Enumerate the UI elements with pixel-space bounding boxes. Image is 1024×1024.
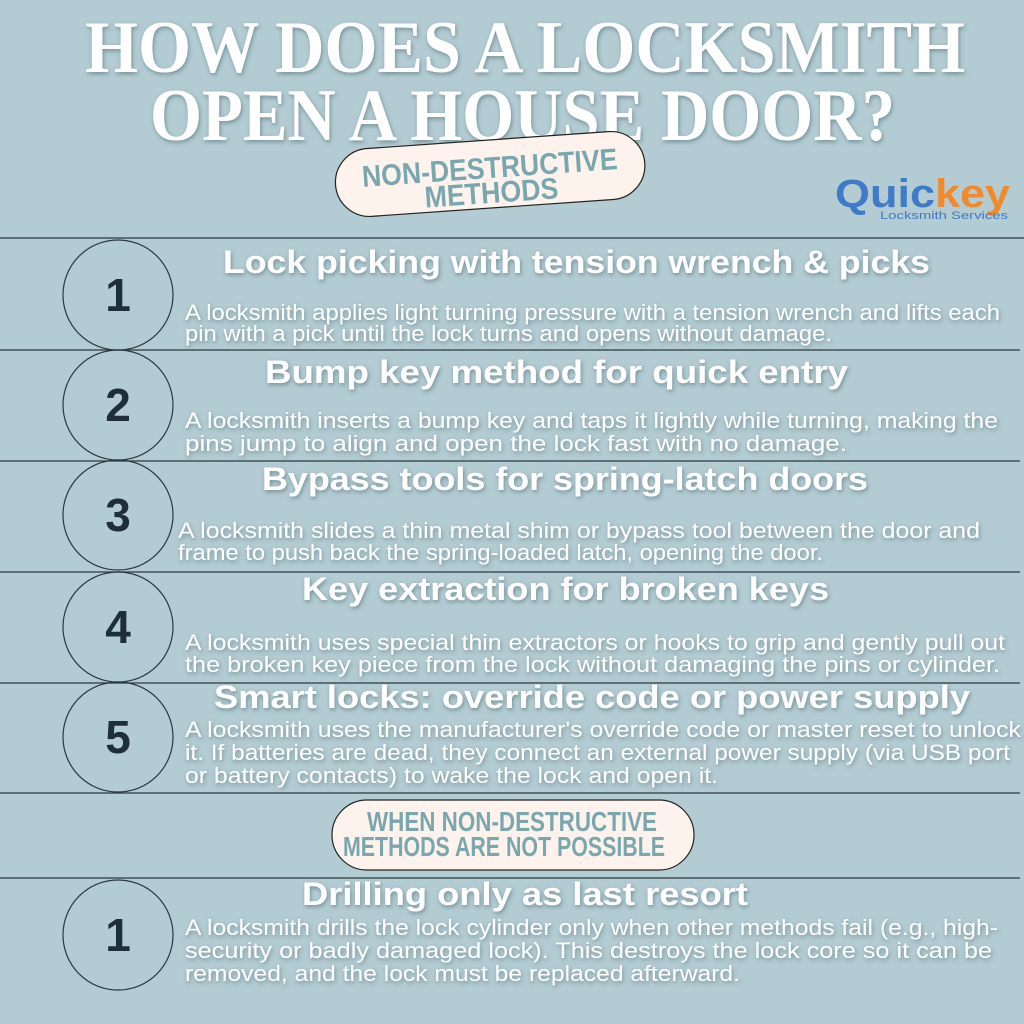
destructive item 1: [63, 876, 998, 990]
item 5: it. If batteries are dead, they connect an external power supply (via USB port: [185, 740, 1010, 765]
item 2: pins jump to align and open the lock fast with no damage.: [185, 431, 847, 456]
item 5: 5: [105, 711, 131, 763]
item 1: Lock picking with tension wrench & picks: [223, 244, 930, 280]
item 1: pin with a pick until the lock turns and opens without damage.: [185, 321, 832, 346]
pill: non-destructive methods: NON-DESTRUCTIVE: [361, 143, 619, 194]
item 4: 4: [105, 601, 131, 653]
item 2: 2: [105, 379, 131, 431]
item 1: [63, 240, 1000, 350]
destructive item 1: removed, and the lock must be replaced afterward.: [185, 961, 740, 986]
item 5: Smart locks: override code or power supply: [214, 679, 970, 715]
destructive item 1: A locksmith drills the lock cylinder only when other methods fail (e.g., high-: [185, 915, 998, 940]
logo: Quic key: [835, 172, 1011, 216]
item 3: A locksmith slides a thin metal shim or bypass tool between the door and: [178, 518, 980, 543]
destructive item 1: Drilling only as last resort: [302, 876, 748, 912]
pill: when non-destructive methods are not possible: WHEN NON-DESTRUCTIVE: [367, 806, 657, 837]
item 3: 3: [105, 489, 131, 541]
item 2: Bump key method for quick entry: [265, 354, 848, 390]
item 1: 1: [105, 269, 131, 321]
item 4: A locksmith uses special thin extractors or hooks to grip and gently pull out: [185, 630, 1005, 655]
pill: when non-destructive methods are not possible: METHODS ARE NOT POSSIBLE: [343, 831, 665, 862]
title: OPEN A HOUSE DOOR?: [150, 75, 895, 157]
item 4: the broken key piece from the lock without damaging the pins or cylinder.: [185, 652, 1000, 677]
item 5: A locksmith uses the manufacturer's override code or master reset to unlock: [185, 717, 1022, 742]
item 3: Bypass tools for spring-latch doors: [262, 461, 868, 497]
item 2: [63, 350, 998, 460]
item 5: [63, 679, 1022, 792]
item 4: Key extraction for broken keys: [302, 571, 829, 607]
item 5: or battery contacts) to wake the lock and open it.: [185, 763, 718, 788]
item 3: [63, 460, 980, 570]
pill: non-destructive methods: [333, 129, 647, 221]
title: [85, 7, 965, 157]
logo: Locksmith Services: [880, 210, 1009, 222]
item 1: A locksmith applies light turning pressure with a tension wrench and lifts each: [185, 300, 1000, 325]
item 4: [63, 571, 1005, 682]
item 2: A locksmith inserts a bump key and taps it lightly while turning, making the: [185, 408, 998, 433]
destructive item 1: security or badly damaged lock). This destroys the lock core so it can be: [185, 938, 992, 963]
pill: when non-destructive methods are not possible: [332, 800, 694, 870]
title: HOW DOES A LOCKSMITH: [85, 7, 965, 89]
destructive item 1: 1: [105, 909, 131, 961]
item 3: frame to push back the spring-loaded latch, opening the door.: [178, 540, 823, 565]
pill: non-destructive methods: METHODS: [424, 172, 559, 215]
